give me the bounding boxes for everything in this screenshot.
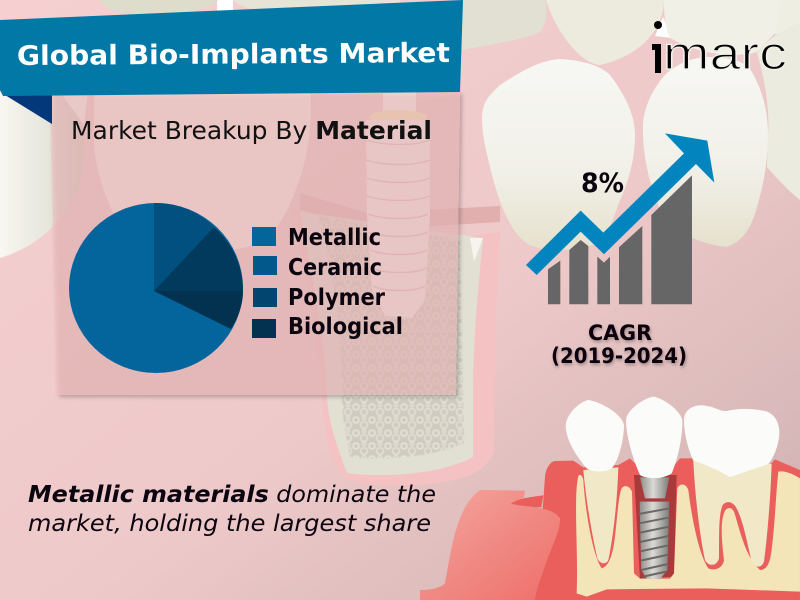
background photo: faded implant <box>366 92 430 318</box>
takeaway text: market, holding the largest share <box>28 511 431 537</box>
legend item: Polymer: Polymer <box>288 285 386 311</box>
panel heading: Market Breakup By Material <box>71 116 432 145</box>
illustration: dental implant model <box>420 397 800 600</box>
root: molar <box>693 461 772 567</box>
banner <box>0 0 463 96</box>
logo: imarc: marc <box>663 27 787 79</box>
icon: growth arrow <box>526 133 714 275</box>
legend item: Metallic: Metallic <box>288 225 381 251</box>
takeaway text <box>28 482 436 537</box>
background photo: front tooth one <box>482 59 635 250</box>
banner fold <box>5 95 52 124</box>
background photo: front tooth two <box>643 57 768 247</box>
implant abutment <box>640 477 669 498</box>
legend item: Biological: Biological <box>288 314 403 340</box>
background photo: tooth behind panel <box>94 90 311 252</box>
front gum flap <box>420 490 560 600</box>
implant screw <box>639 502 670 579</box>
background photo: left tooth <box>0 92 84 258</box>
background photo: upper teeth <box>100 0 800 200</box>
gum body <box>530 458 800 600</box>
root: left tooth <box>583 467 618 563</box>
crown: left tooth <box>566 400 624 471</box>
takeaway text: Metallic materials dominate the <box>28 482 436 508</box>
crown: implant tooth <box>626 397 682 478</box>
title: Global Bio-Implants Market <box>17 38 450 72</box>
legend <box>252 225 403 340</box>
CAGR label: (2019-2024) <box>551 344 687 368</box>
legend item: Ceramic: Ceramic <box>288 255 382 281</box>
legend item: Polymer <box>253 285 386 311</box>
bone <box>576 471 800 597</box>
pie chart <box>69 203 243 373</box>
back gum flap <box>511 495 543 507</box>
CAGR label: CAGR <box>588 321 652 345</box>
icon: growth bars <box>548 175 692 304</box>
panel: market breakup <box>50 92 460 395</box>
legend item: Metallic <box>252 225 381 251</box>
legend item: Ceramic <box>253 255 382 281</box>
CAGR value: 8% <box>581 168 624 199</box>
CAGR label <box>551 321 687 368</box>
background photo: gum band and bone section <box>60 92 500 486</box>
implant socket <box>634 475 677 579</box>
crown: molar <box>684 405 779 477</box>
logo: imarc <box>652 21 787 79</box>
